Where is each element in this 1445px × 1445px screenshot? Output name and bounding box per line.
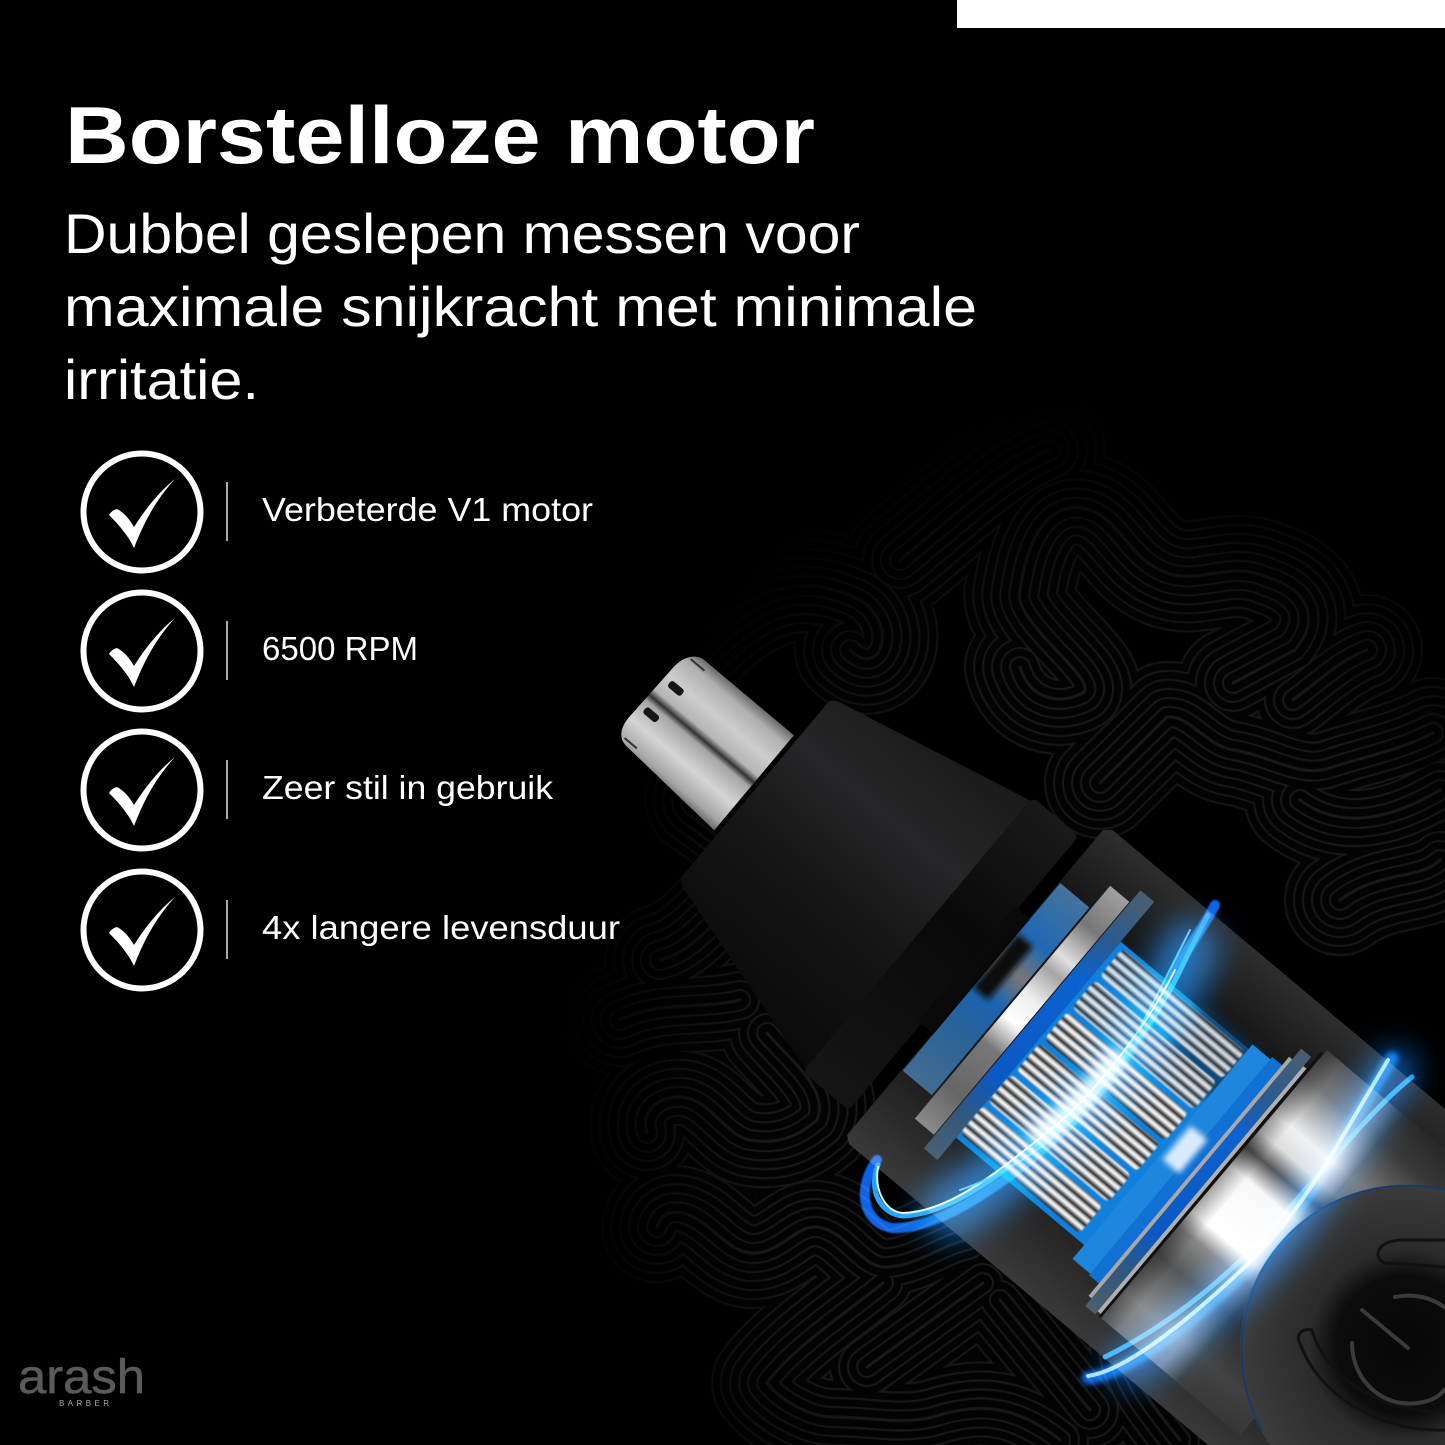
- trimmer head and nose: [526, 565, 1079, 1110]
- power button panel: [1240, 1185, 1445, 1445]
- intro paragraph: irritatie.: [64, 348, 259, 411]
- intro paragraph: Dubbel geslepen messen voor: [64, 202, 860, 265]
- blue-grey ring two: [924, 890, 1154, 1160]
- feature: 6500 RPM: 6500 RPM: [262, 630, 418, 667]
- white corner bar: [957, 0, 1445, 28]
- silver motor sleeve: [1101, 1050, 1445, 1435]
- silver trimmer head: [609, 647, 794, 830]
- feature: zeer stil: [84, 732, 554, 848]
- sleeve shading: [1101, 1050, 1445, 1435]
- intro paragraph: maximale snijkracht met minimale: [64, 275, 977, 338]
- light blue rotor end: [1073, 1044, 1272, 1276]
- collar: [803, 797, 1079, 1110]
- title: Borstelloze motor: [65, 91, 815, 181]
- feature: V1 motor: [84, 454, 593, 570]
- silver ring one: [915, 886, 1129, 1135]
- feature: V1 motor: Verbeterde V1 motor: [262, 491, 593, 528]
- motor window: [847, 835, 1328, 1319]
- power icon: [1298, 1240, 1444, 1430]
- blue light arc upper: [865, 905, 1215, 1228]
- blue plate left: [903, 883, 1089, 1095]
- feature: zeer stil: Zeer stil in gebruik: [262, 769, 554, 806]
- background swirl pattern: [624, 481, 1445, 1445]
- black nose cone: [638, 660, 1030, 1069]
- feature: levensduur: 4x langere levensduur: [262, 909, 620, 946]
- rotor backing: [956, 942, 1266, 1260]
- feature: levensduur: [84, 872, 620, 988]
- button rim: [1242, 1185, 1445, 1430]
- dark inner block: [918, 906, 1053, 1053]
- feature list: [84, 454, 620, 988]
- blue light arc lower: [1088, 1058, 1412, 1378]
- rotor ribs: [960, 945, 1245, 1240]
- brand logo: BARBER: [59, 1399, 109, 1408]
- brand logo: arash: [18, 1351, 145, 1404]
- product: nose trimmer: [526, 565, 1445, 1445]
- feature: 6500 RPM: [84, 592, 418, 710]
- intro paragraph: [64, 202, 977, 411]
- main body: [847, 830, 1445, 1445]
- right rings: [1058, 1018, 1323, 1319]
- blue energy glow: [950, 950, 1395, 1365]
